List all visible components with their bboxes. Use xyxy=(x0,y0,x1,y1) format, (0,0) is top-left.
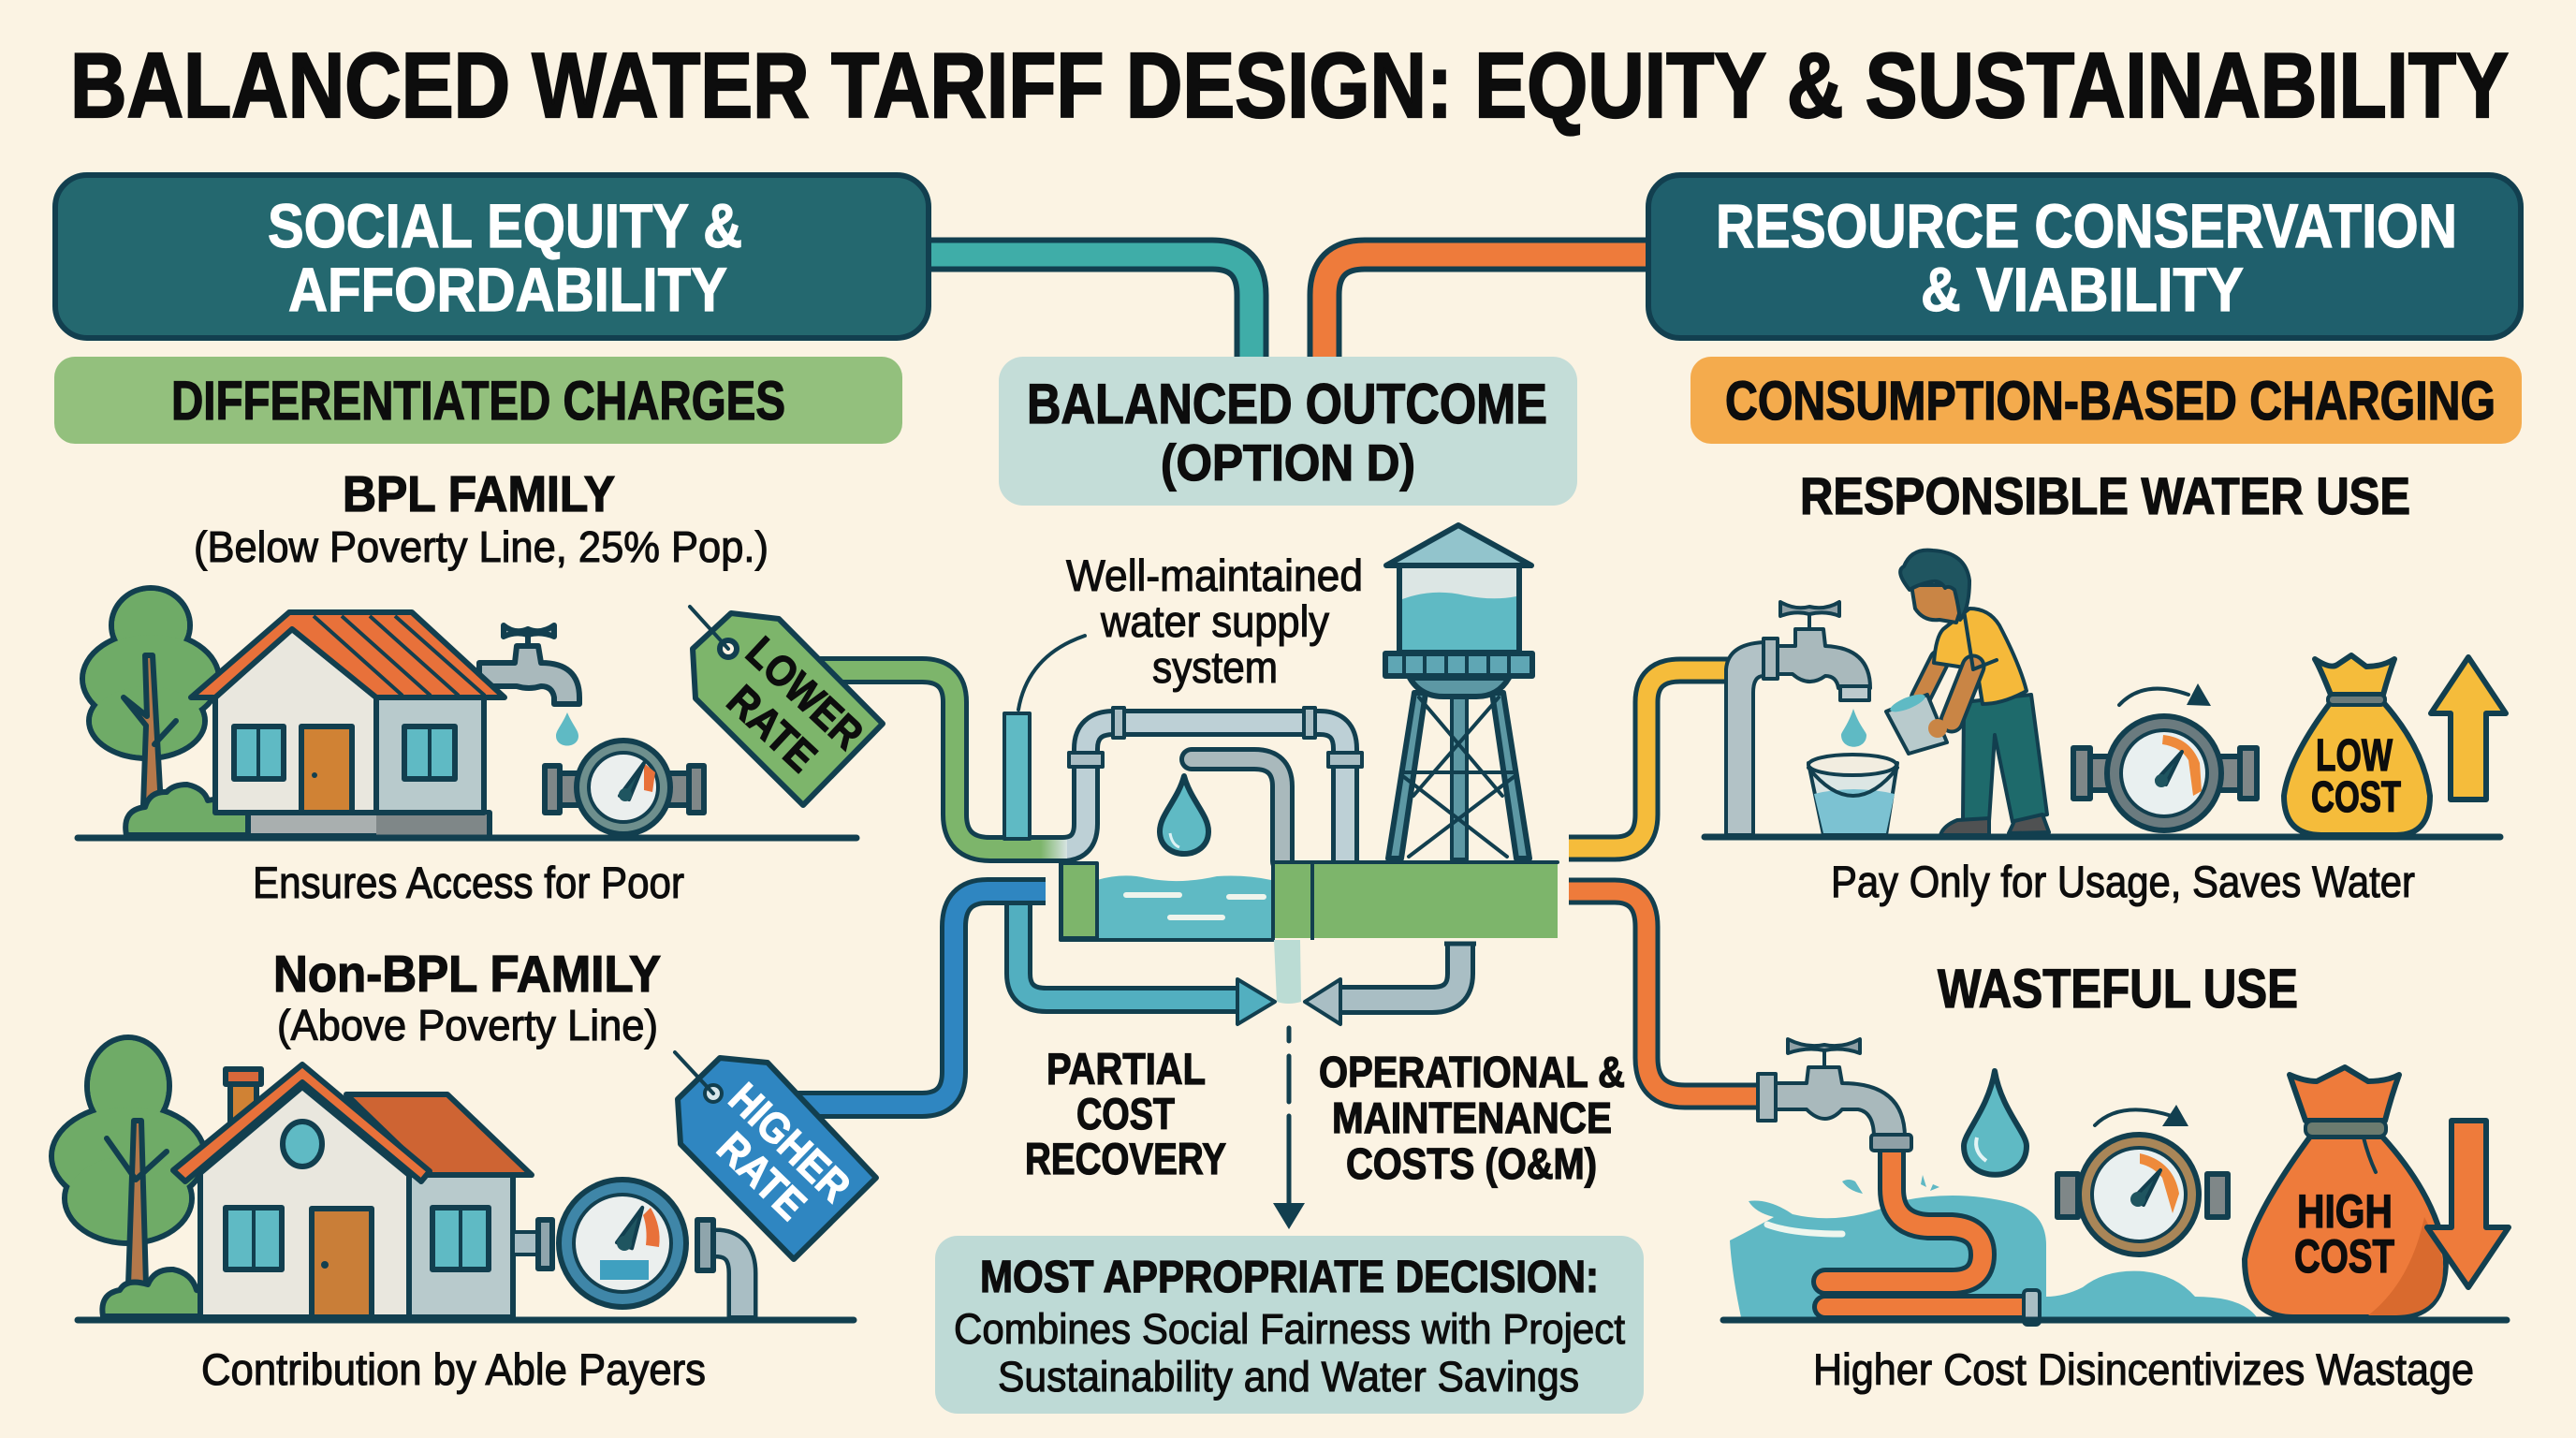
heading: resource conservation xyxy=(1716,191,2457,324)
grey supply pipes xyxy=(1041,708,1362,861)
ground line xyxy=(1705,833,2500,841)
label: operational and maintenance costs xyxy=(1319,1048,1625,1188)
icon: tree xyxy=(82,588,219,806)
heading: BPL family: (Below Poverty Line, 25% Pop.) xyxy=(194,522,768,571)
caption: pay only for usage: Pay Only for Usage, Saves Water xyxy=(1831,857,2415,906)
panel: social equity header xyxy=(55,175,929,338)
illustration: BPL house scene xyxy=(78,588,856,838)
heading: non-BPL family: (Above Poverty Line) xyxy=(277,1001,658,1049)
label: operational and maintenance costs: COSTS (O&M) xyxy=(1346,1139,1597,1188)
arrow: operations and maintenance flow xyxy=(1305,944,1476,1024)
icon: faucet xyxy=(1758,1039,1905,1137)
panel: most appropriate decision: MOST APPROPRIATE DECISION: xyxy=(980,1253,1599,1302)
label: well-maintained water supply system: water supply xyxy=(1100,596,1329,646)
icon: water meter xyxy=(2073,716,2257,830)
label: partial cost recovery: PARTIAL xyxy=(1046,1044,1206,1093)
heading: responsible water use: RESPONSIBLE WATER USE xyxy=(1800,466,2410,525)
heading: BPL family xyxy=(194,466,768,571)
icon: bucket xyxy=(1808,755,1897,835)
tag: higher rate xyxy=(675,1052,876,1259)
illustration: non-BPL house scene xyxy=(51,1037,854,1320)
banner: differentiated charges: DIFFERENTIATED CHARGES xyxy=(171,371,785,432)
connector pipe: resource conservation to balanced outcome xyxy=(1325,255,1650,359)
icon: water meter xyxy=(545,741,704,834)
icon: high cost bag: HIGH xyxy=(2297,1185,2393,1238)
panel: resource conservation header xyxy=(1648,175,2521,338)
foundation block xyxy=(1273,862,1558,940)
tag: higher rate: RATE xyxy=(708,1123,816,1229)
icon: house xyxy=(173,1064,532,1317)
label: operational and maintenance costs: OPERATIONAL & xyxy=(1319,1048,1625,1096)
icon: bush xyxy=(125,785,255,835)
icon: water drop xyxy=(1964,1071,2027,1175)
icon: down arrow xyxy=(2427,1121,2509,1287)
icon: orange hose xyxy=(1825,1151,2040,1325)
pipe: yellow to responsible use xyxy=(1569,670,1730,848)
water basin xyxy=(1061,862,1273,940)
label: operational and maintenance costs: MAINTENANCE xyxy=(1332,1093,1612,1142)
heading: wasteful use: WASTEFUL USE xyxy=(1938,959,2298,1020)
icon: faucet xyxy=(1726,602,1870,835)
illustration: wasteful use scene xyxy=(1723,1039,2509,1325)
heading: social equity: SOCIAL EQUITY & xyxy=(268,191,742,260)
outflow stream xyxy=(1274,940,1301,1004)
label: partial cost recovery: RECOVERY xyxy=(1025,1134,1226,1183)
ground line xyxy=(78,835,856,841)
icon: water meter xyxy=(2057,1135,2228,1255)
pipe: orange to wasteful use xyxy=(1569,891,1760,1096)
panel: most appropriate decision: Combines Social Fairness with Project xyxy=(954,1305,1625,1353)
icon: low cost bag xyxy=(2284,655,2430,835)
connector pipe: social equity to balanced outcome xyxy=(927,255,1251,359)
heading: resource conservation: RESOURCE CONSERVATION xyxy=(1716,191,2457,260)
ground line xyxy=(1723,1316,2507,1324)
arrow: dashed line to decision xyxy=(1273,1028,1305,1229)
heading: social equity xyxy=(268,191,742,324)
panel: balanced outcome: BALANCED OUTCOME xyxy=(1027,373,1547,435)
icon: high cost bag xyxy=(2245,1067,2446,1317)
tag: lower rate: RATE xyxy=(718,675,827,782)
heading: BPL family: BPL FAMILY xyxy=(343,466,615,522)
icon: rotation arrow xyxy=(2119,683,2211,706)
ground line xyxy=(78,1316,854,1324)
icon: house xyxy=(191,612,505,836)
tag: lower rate: LOWER xyxy=(737,627,873,758)
arrow: partial cost recovery flow xyxy=(1018,905,1275,1024)
icon: low cost bag: COST xyxy=(2311,772,2401,821)
central water supply system xyxy=(1004,525,1558,1024)
panel: balanced outcome: (OPTION D) xyxy=(1161,433,1415,492)
caption: higher cost disincentivizes wastage: Higher Cost Disincentivizes Wastage xyxy=(1813,1344,2474,1394)
icon: up arrow xyxy=(2431,657,2506,800)
panel: most appropriate decision: Sustainability and Water Savings xyxy=(998,1353,1579,1401)
heading: social equity: AFFORDABILITY xyxy=(288,255,727,324)
panel: most appropriate decision xyxy=(935,1236,1644,1414)
icon: meter pipes xyxy=(513,1232,742,1317)
inlet tube xyxy=(1004,713,1030,839)
label: well-maintained water supply system xyxy=(1018,550,1363,710)
label: partial cost recovery: COST xyxy=(1076,1089,1175,1138)
heading: non-BPL family: Non-BPL FAMILY xyxy=(273,945,661,1003)
heading: non-BPL family xyxy=(273,945,661,1049)
icon: tree xyxy=(51,1037,205,1285)
illustration: responsible use scene xyxy=(1705,550,2506,837)
label: partial cost recovery xyxy=(1025,1044,1226,1183)
pipe: blue from higher rate tag to system xyxy=(786,891,1046,1105)
caption: contribution by able payers: Contribution by Able Payers xyxy=(201,1344,706,1394)
heading: resource conservation: & VIABILITY xyxy=(1921,255,2244,324)
icon: person filling water xyxy=(1886,550,2049,835)
icon: bush xyxy=(102,1269,228,1316)
panel: balanced outcome xyxy=(999,357,1577,506)
icon: high cost bag: COST xyxy=(2294,1230,2394,1283)
icon: water meter xyxy=(538,1180,713,1307)
pipe: green from lower rate tag to system xyxy=(805,670,1058,849)
icon: water tower xyxy=(1385,525,1532,859)
label: well-maintained water supply system: system xyxy=(1152,642,1278,692)
label: well-maintained water supply system: Well-maintained xyxy=(1066,550,1363,600)
banner: differentiated charges xyxy=(54,357,902,444)
icon: rotation arrow xyxy=(2095,1105,2188,1126)
icon: water drop xyxy=(1841,709,1866,747)
water spill xyxy=(1730,1175,2257,1317)
icon: low cost bag: LOW xyxy=(2316,731,2393,781)
tag: lower rate xyxy=(690,607,883,805)
tag: higher rate: HIGHER xyxy=(720,1073,860,1211)
caption: ensures access: Ensures Access for Poor xyxy=(253,858,684,907)
banner: consumption-based charging xyxy=(1690,357,2522,444)
icon: faucet xyxy=(479,625,579,704)
icon: water drop xyxy=(1160,776,1208,854)
icon: water drop xyxy=(556,712,578,745)
